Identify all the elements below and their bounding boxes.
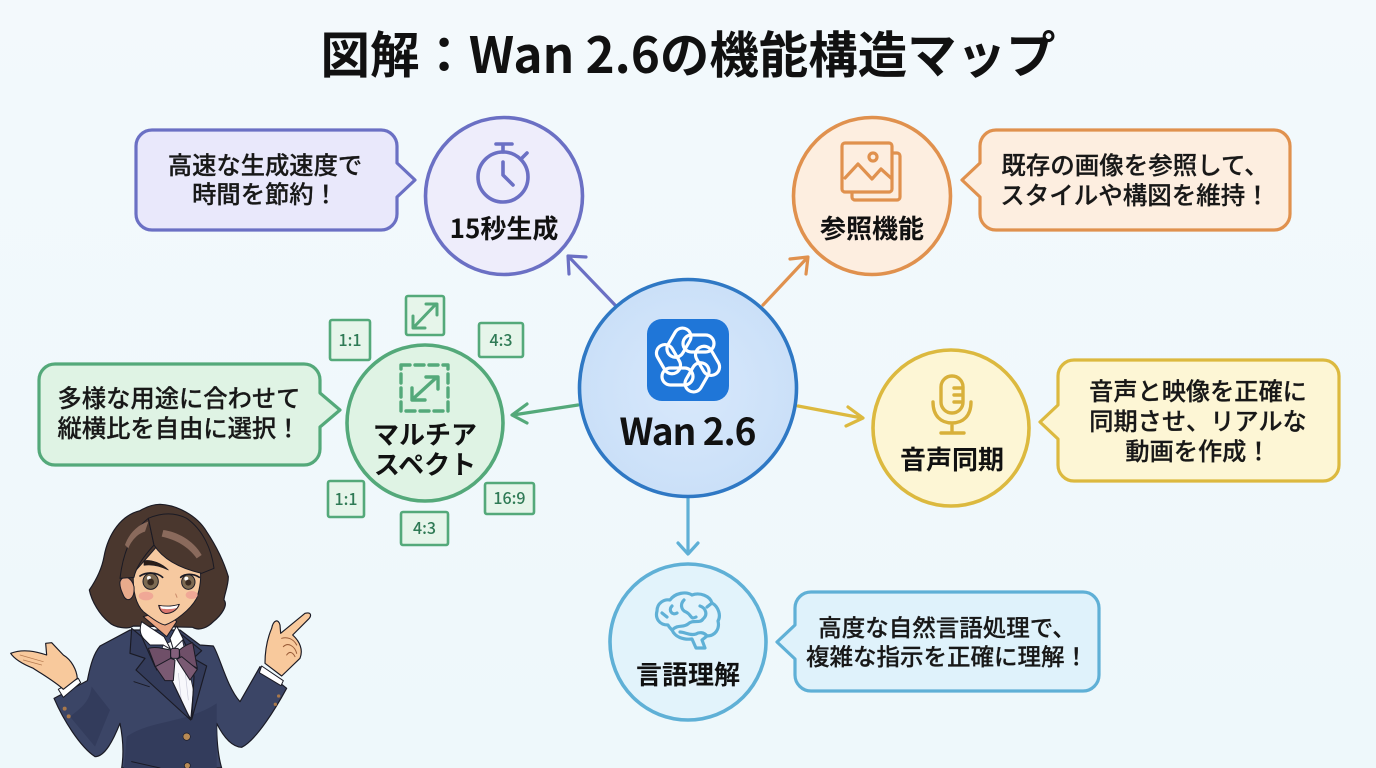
arrow: center to マルチアスペクト (512, 404, 578, 423)
tile: 1:1 bottom (328, 481, 364, 517)
tile: 4:3 bottom: 4:3 (413, 515, 436, 539)
callout text: 動画を作成！ (1125, 432, 1271, 467)
tile: 4:3 top (479, 323, 523, 357)
callout text: 縦横比を自由に選択！ (58, 409, 300, 444)
label: 言語理解 (636, 655, 740, 692)
panel: 参照機能 node (794, 118, 950, 274)
callout text: 既存の画像を参照して、 (1001, 147, 1269, 182)
tile: 1:1 bottom: 1:1 (334, 486, 358, 510)
icon: microphone (933, 376, 971, 433)
panel: 言語理解 node (610, 564, 766, 720)
icon: images (842, 143, 900, 200)
panel: マルチアスペクト node (347, 345, 503, 501)
panel: 参照機能 callout (962, 130, 1290, 230)
panel: 15秒生成 callout (136, 130, 415, 230)
icon: stopwatch (478, 144, 528, 202)
callout text: 高度な自然言語処理で、 (818, 609, 1076, 643)
callout text: スタイルや構図を維持！ (1000, 177, 1270, 212)
callout text: 複雑な指示を正確に理解！ (806, 638, 1088, 672)
tile: 16:9: 16:9 (493, 485, 526, 509)
panel: 音声同期 callout (1040, 360, 1339, 481)
arrow: center to 音声同期 (798, 406, 863, 426)
panel: central node Wan 2.6 (580, 280, 796, 496)
callout text: 時間を節約！ (192, 175, 338, 210)
label: マルチア (373, 415, 477, 452)
tile: 4:3 top: 4:3 (489, 327, 513, 351)
tile: 1:1 top: 1:1 (338, 327, 362, 351)
panel: 音声同期 node (873, 350, 1029, 506)
aspect ratio tiles (328, 296, 534, 545)
arrow: center to 参照機能 (763, 257, 808, 305)
label: 参照機能 (820, 209, 924, 246)
illustration: presenter character (11, 504, 311, 768)
label: 15秒生成 (450, 209, 558, 246)
icon: dashed expand (401, 365, 448, 411)
callout text: 高速な生成速度で (168, 146, 362, 181)
callout text: 多様な用途に合わせて (58, 379, 300, 414)
arrow: center to 言語理解 (678, 497, 698, 554)
label: スペクト (374, 445, 476, 482)
panel: 15秒生成 node (426, 118, 582, 274)
arrow: center to 15秒生成 (568, 256, 615, 305)
title: 図解：Wan 2.6の機能構造マップ (320, 16, 1056, 88)
tile: 4:3 bottom (401, 512, 448, 545)
panel: マルチアスペクト callout (39, 364, 340, 465)
panel: 言語理解 callout (777, 592, 1099, 691)
callout text: 同期させ、リアルな (1089, 402, 1307, 437)
label: Wan 2.6: Wan 2.6 (620, 402, 756, 456)
tile: expand (406, 296, 444, 335)
label: 音声同期 (900, 440, 1004, 477)
icon: brain (656, 593, 719, 648)
icon: knot logo (647, 319, 729, 401)
tile: 1:1 top (330, 320, 370, 360)
callout text: 音声と映像を正確に (1089, 372, 1307, 407)
tile: 16:9 (485, 483, 534, 514)
